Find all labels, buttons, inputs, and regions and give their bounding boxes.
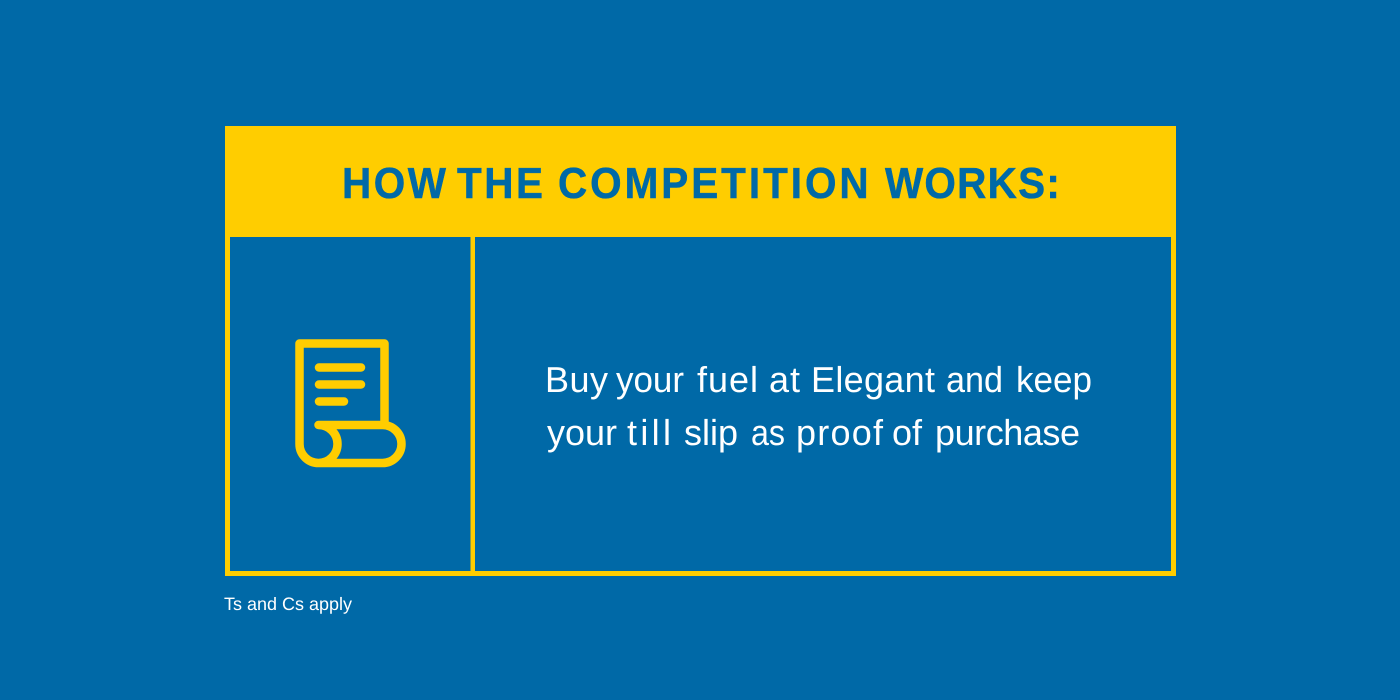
body text: as: [751, 412, 785, 453]
body text: Elegant: [811, 359, 935, 400]
body text: till: [627, 412, 671, 453]
heading: HOW: [342, 160, 447, 208]
footnote: Ts and Cs apply: [224, 594, 352, 614]
icon: till slip scroll: [300, 344, 402, 463]
heading: [342, 160, 1060, 208]
body text: at: [769, 359, 800, 400]
body text: your: [547, 412, 617, 453]
panel: competition step: [225, 126, 1176, 574]
body text: [545, 359, 1092, 453]
panel outline: [228, 128, 1174, 574]
body text: of: [892, 412, 923, 453]
body text: fuel: [697, 359, 758, 400]
body text: and: [946, 359, 1003, 400]
heading: WORKS:: [885, 160, 1060, 208]
body text: purchase: [935, 412, 1080, 453]
body text: proof: [796, 412, 884, 453]
body text: slip: [684, 412, 738, 453]
heading: COMPETITION: [558, 160, 869, 208]
heading band: [225, 126, 1176, 237]
heading: THE: [457, 160, 543, 208]
body text: your: [616, 359, 684, 400]
column divider: [470, 237, 475, 573]
body text: Buy: [545, 359, 608, 400]
body text: keep: [1016, 359, 1092, 400]
